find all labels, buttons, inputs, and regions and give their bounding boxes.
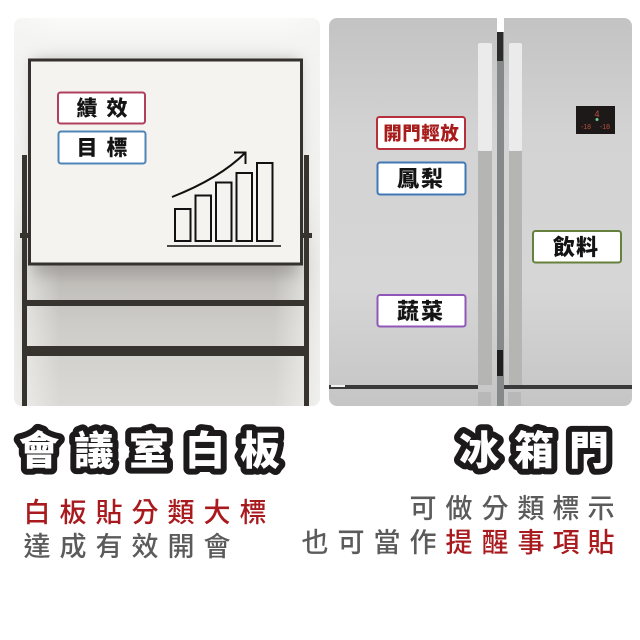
right handle	[508, 43, 522, 406]
label: 開門輕放	[377, 117, 465, 149]
label: 目標: 目標	[76, 137, 128, 160]
door gap	[497, 32, 504, 406]
text block: left description: 達成有效開會	[24, 532, 230, 562]
label: 績效: 績效	[76, 96, 128, 120]
label: 績效	[58, 92, 145, 124]
bar chart with arrow	[167, 152, 281, 246]
label: 蔬菜: 蔬菜	[397, 299, 443, 324]
label: 目標	[58, 132, 146, 164]
heading: 會議室白板: 會議室白板	[19, 428, 280, 474]
label: 飲料: 飲料	[553, 235, 598, 260]
icon: temperature display: 4	[594, 109, 600, 119]
icon: temperature display: -18	[581, 124, 591, 131]
stand legs	[20, 155, 312, 406]
text block: right description: 也可當作 提醒事項貼	[302, 528, 614, 558]
heading: 冰箱門: 冰箱門	[459, 430, 609, 474]
text block: left description	[24, 498, 266, 562]
text block: left description: 白板貼分類大標	[24, 498, 266, 528]
text block: right description: 可做分類標示	[410, 494, 614, 524]
left handle	[478, 43, 492, 406]
panel: refrigerator photo	[329, 18, 632, 406]
label: 開門輕放: 開門輕放	[383, 123, 459, 144]
label: 鳳梨	[378, 162, 466, 194]
panel: whiteboard photo	[14, 18, 320, 406]
text block: right description	[302, 494, 614, 558]
label: 鳳梨: 鳳梨	[397, 166, 443, 192]
icon: temperature display: -18	[600, 124, 610, 131]
label: 蔬菜	[378, 295, 466, 326]
freezer seam	[329, 385, 632, 389]
icon: temperature display	[576, 106, 615, 134]
whiteboard	[30, 60, 302, 264]
label: 飲料	[533, 231, 621, 262]
